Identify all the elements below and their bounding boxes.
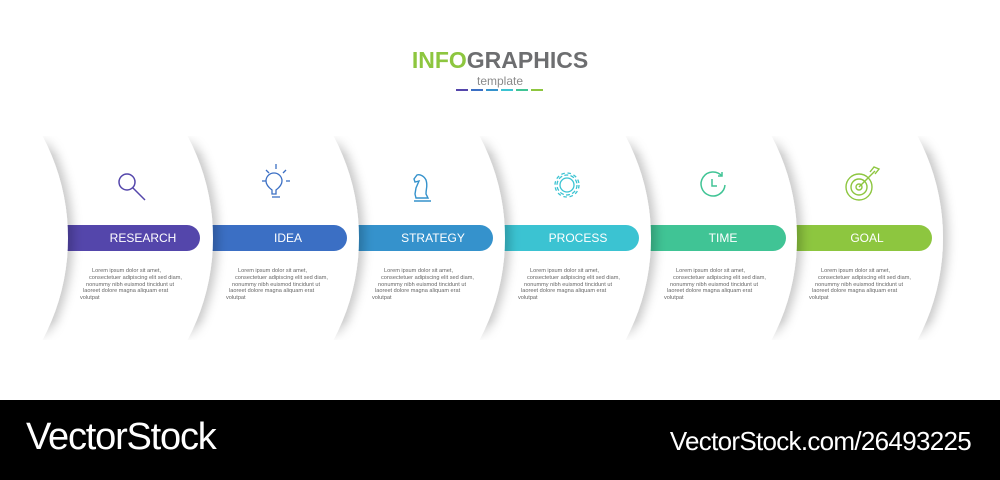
descriptions: Lorem ipsum dolor sit amet, [821,268,890,274]
icon: chess knight [414,175,431,201]
descriptions: consectetuer adipiscing elit sed diam, [527,275,620,281]
descriptions: nonummy nibh euismod tincidunt ut [232,282,320,288]
descriptions: Lorem ipsum dolor sit amet, [530,268,599,274]
descriptions: nonummy nibh euismod tincidunt ut [378,282,466,288]
descriptions: consectetuer adipiscing elit sed diam, [673,275,766,281]
descriptions: laoreet dolore magna aliquam erat [667,288,753,294]
descriptions: laoreet dolore magna aliquam erat [83,288,169,294]
title: INFOGRAPHICS [412,47,588,73]
descriptions: nonummy nibh euismod tincidunt ut [815,282,903,288]
descriptions: volutpat [80,295,100,301]
descriptions: volutpat [372,295,392,301]
descriptions: nonummy nibh euismod tincidunt ut [670,282,758,288]
bar labels: PROCESS [549,231,607,245]
descriptions: consectetuer adipiscing elit sed diam, [235,275,328,281]
descriptions: volutpat [518,295,538,301]
bar labels: RESEARCH [110,231,176,245]
descriptions: consectetuer adipiscing elit sed diam, [381,275,474,281]
descriptions: laoreet dolore magna aliquam erat [229,288,315,294]
descriptions: laoreet dolore magna aliquam erat [812,288,898,294]
bar labels: STRATEGY [401,231,465,245]
bar labels: GOAL [850,231,884,245]
icon: clock [701,172,725,196]
descriptions: volutpat [226,295,246,301]
footer logo: VectorStock [26,416,216,458]
bar labels: IDEA [274,231,302,245]
title [412,47,588,91]
descriptions: laoreet dolore magna aliquam erat [375,288,461,294]
descriptions: Lorem ipsum dolor sit amet, [676,268,745,274]
descriptions: volutpat [809,295,829,301]
descriptions: Lorem ipsum dolor sit amet, [384,268,453,274]
icon: gear [555,173,579,197]
descriptions: consectetuer adipiscing elit sed diam, [818,275,911,281]
footer url: VectorStock.com/26493225 [670,426,971,456]
descriptions: nonummy nibh euismod tincidunt ut [86,282,174,288]
descriptions: nonummy nibh euismod tincidunt ut [524,282,612,288]
descriptions: Lorem ipsum dolor sit amet, [238,268,307,274]
descriptions: consectetuer adipiscing elit sed diam, [89,275,182,281]
bar labels [110,231,884,245]
title: template [477,74,523,88]
descriptions: laoreet dolore magna aliquam erat [521,288,607,294]
descriptions: volutpat [664,295,684,301]
footer bar [0,400,1000,480]
bar labels: TIME [709,231,737,245]
icon: target [846,167,879,200]
descriptions [80,268,911,301]
icon: magnifier [119,174,145,200]
arcs and bars [44,138,953,338]
icon: bulb [262,164,290,197]
descriptions: Lorem ipsum dolor sit amet, [92,268,161,274]
main infographic [44,52,953,338]
